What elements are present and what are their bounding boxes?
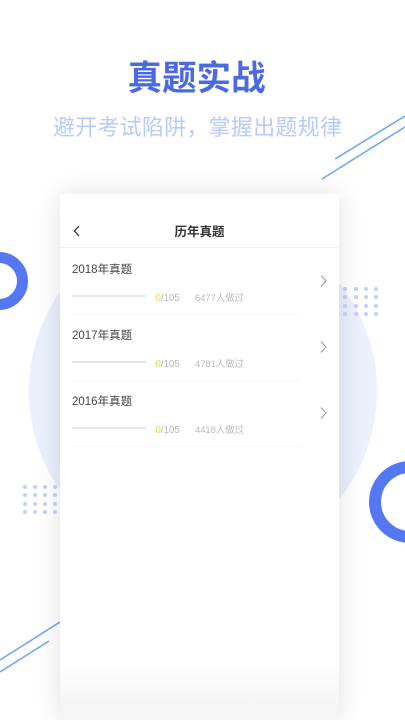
panel: phone screen [60, 194, 339, 720]
row title: 2018年真题 [72, 264, 132, 276]
count: 4418人做过 [195, 424, 244, 435]
bottom fade [60, 664, 339, 720]
icon: chevron [320, 407, 326, 419]
large pale circle [29, 217, 377, 565]
title: 真题实战 [128, 60, 266, 98]
row: 2018 [72, 263, 326, 304]
ring: left [0, 258, 22, 304]
row: 2016 [72, 395, 326, 436]
row title: 2016年真题 [72, 396, 132, 408]
lines: top right [322, 116, 405, 179]
count: 4781人做过 [195, 358, 244, 369]
count: 6477人做过 [195, 292, 244, 303]
subtitle: 避开考试陷阱，掌握出题规律 [53, 115, 342, 140]
icon: back arrow [74, 226, 80, 236]
dots: left [23, 485, 57, 514]
score: 0/105 [156, 425, 180, 436]
progress bar [72, 427, 146, 429]
row title: 2017年真题 [72, 330, 132, 342]
icon: chevron [320, 275, 326, 287]
nav bar [60, 194, 339, 248]
icon: chevron [320, 341, 326, 353]
ring: right [375, 467, 405, 537]
score: 0/105 [156, 359, 180, 370]
row: 2017 [72, 329, 326, 370]
lines: bottom left [0, 622, 60, 672]
dots: right [343, 287, 378, 316]
progress bar [72, 361, 146, 363]
nav title: 历年真题 [174, 225, 224, 239]
progress bar [72, 295, 146, 297]
score: 0/105 [156, 293, 180, 304]
